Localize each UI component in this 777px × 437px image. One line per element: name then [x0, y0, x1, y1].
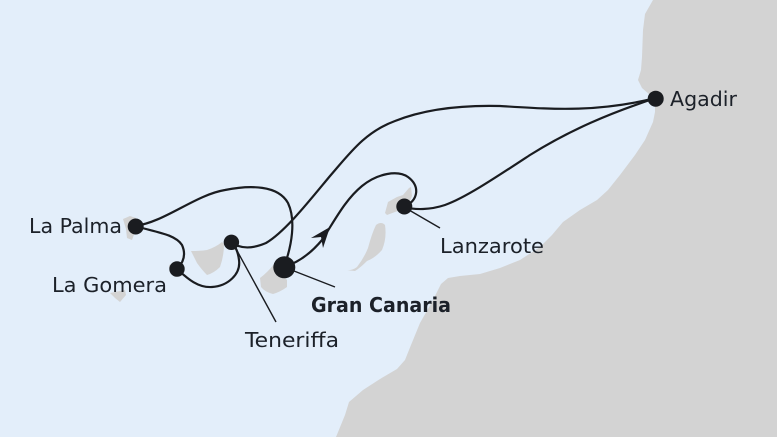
marker: Agadir [648, 91, 664, 107]
label: Teneriffa: Teneriffa [244, 328, 339, 352]
island: El Hierro [110, 290, 126, 302]
island: Fuerteventura [345, 223, 386, 271]
island: La Gomera [169, 262, 184, 277]
leader: Teneriffa [235, 247, 276, 322]
label: La Gomera: La Gomera [52, 273, 167, 297]
route: Teneriffa to Agadir [231, 98, 656, 247]
marker: La Palma [128, 218, 144, 234]
island: Gran Canaria [260, 264, 287, 294]
route lines [135, 98, 656, 287]
island: Teneriffa [191, 242, 224, 275]
route: La Palma to La Gomera [135, 226, 184, 269]
label: Gran Canaria: Gran Canaria [311, 293, 451, 317]
label: Agadir: Agadir [670, 87, 738, 111]
route: Lanzarote loop to Gran Canaria [284, 173, 416, 267]
marker: Lanzarote [396, 198, 412, 214]
arrowhead [311, 227, 330, 248]
marker: La Gomera [169, 261, 185, 277]
islands [110, 187, 412, 302]
port markers [128, 91, 664, 278]
leader: Lanzarote [409, 210, 440, 228]
route: Agadir to Lanzarote [404, 98, 656, 209]
island: Lanzarote [385, 187, 412, 215]
label: Lanzarote: Lanzarote [440, 234, 544, 258]
African mainland [336, 0, 777, 437]
route: Gran Canaria to La Palma [135, 187, 292, 267]
island: La Palma [123, 216, 136, 240]
leader lines [235, 210, 440, 322]
labels [29, 87, 738, 352]
leader: Gran Canaria [294, 271, 335, 287]
label: La Palma: La Palma [29, 214, 122, 238]
marker: Gran Canaria [273, 256, 295, 278]
marker: Teneriffa [224, 235, 239, 250]
route: La Gomera to Teneriffa [177, 242, 239, 287]
